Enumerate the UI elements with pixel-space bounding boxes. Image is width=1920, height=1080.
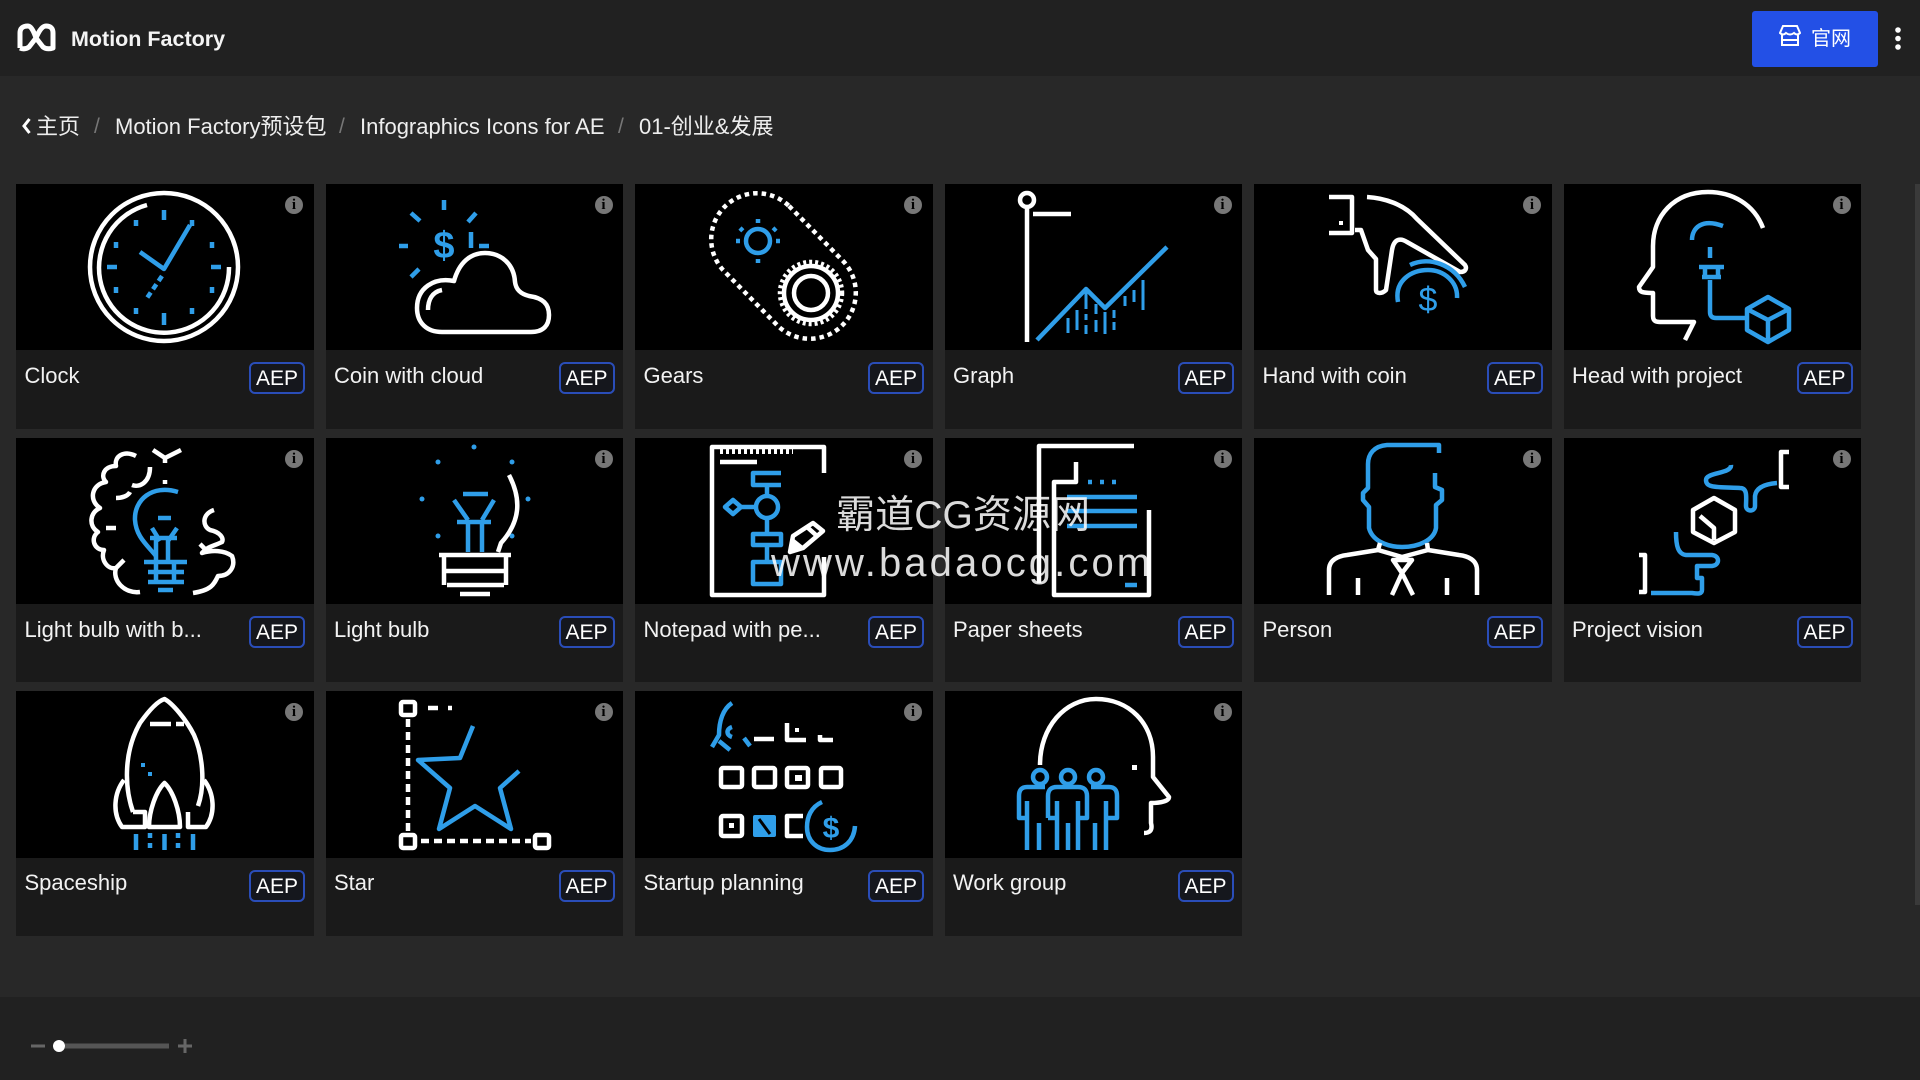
label: Clock: [24, 363, 80, 388]
format badge: [1178, 616, 1234, 648]
icon: paper sheets: [944, 438, 1242, 604]
icon: startup planning: [635, 691, 932, 858]
format badge: [558, 870, 614, 902]
format badge: [868, 362, 924, 394]
label: Light bulb with b...: [24, 617, 202, 642]
info badge: i: [911, 704, 915, 720]
card: Notepad with pen: [635, 438, 932, 682]
info badge: i: [1220, 197, 1225, 213]
label: Star: [334, 870, 374, 895]
icon: notepad with pen: [635, 438, 932, 604]
info badge: [904, 450, 922, 468]
info badge: i: [911, 197, 915, 213]
card: Head with project: [1564, 184, 1861, 429]
label: Work group: [953, 870, 1066, 895]
card: Graph: [944, 184, 1242, 429]
icon: head with project: [1564, 184, 1861, 350]
info badge: i: [601, 704, 606, 720]
icon: light bulb with brain: [16, 438, 314, 604]
info badge: i: [1530, 197, 1534, 213]
info badge: [594, 450, 612, 468]
format badge: [558, 362, 614, 394]
card: Coin with cloud: [326, 184, 623, 429]
icon: person: [1254, 438, 1552, 604]
label: Head with project: [1572, 363, 1742, 388]
header bar: [0, 0, 1920, 76]
label: Person: [1262, 617, 1332, 642]
icon: hand with coin: [1254, 184, 1552, 350]
info badge: i: [292, 704, 296, 720]
card: Project vision: [1564, 438, 1861, 682]
icon: coin with cloud: $: [433, 225, 454, 267]
card: Star: [326, 691, 623, 936]
icon: project vision: [1564, 438, 1861, 604]
info badge: [1523, 450, 1541, 468]
scrollbar: [1915, 184, 1920, 905]
crumb separators: /: [618, 115, 624, 138]
info badge: [594, 196, 612, 214]
zoom slider: [31, 1039, 192, 1053]
label: Startup planning: [644, 870, 804, 895]
info badge: i: [1839, 197, 1844, 213]
info badge: i: [1220, 451, 1225, 467]
format badge: [1487, 362, 1543, 394]
button label: 官网: [1811, 28, 1851, 50]
icon: more menu: [1895, 27, 1901, 50]
format badge: AEP: [256, 621, 298, 644]
label: Light bulb: [334, 617, 429, 642]
format badge: AEP: [256, 367, 298, 390]
crumb separators: /: [339, 115, 345, 138]
format badge: AEP: [565, 367, 608, 390]
format badge: AEP: [1184, 621, 1227, 644]
crumb: current: 01-创业&发展: [639, 114, 773, 139]
crumb: home: 主页: [36, 114, 80, 139]
format badge: AEP: [256, 875, 298, 898]
icon: back chevron: [22, 118, 31, 134]
format badge: [868, 616, 924, 648]
card: Person: [1254, 438, 1552, 682]
card: Clock: [16, 184, 314, 429]
watermark url: www.badaocg.com: [771, 541, 1153, 585]
crumb: icons: Infographics Icons for AE: [360, 114, 605, 139]
icon: store: [1779, 25, 1801, 46]
card: Spaceship: [16, 691, 314, 936]
info badge: [285, 196, 303, 214]
info badge: [1214, 703, 1232, 721]
format badge: AEP: [1184, 367, 1227, 390]
icon: work group: [944, 691, 1242, 858]
format badge: [249, 870, 305, 902]
crumb separators: [94, 115, 624, 138]
icon: startup planning: $: [823, 812, 840, 845]
icon: star: [326, 691, 623, 858]
format badge: [249, 616, 305, 648]
info badge: [1523, 196, 1541, 214]
format badge: AEP: [1184, 875, 1227, 898]
format badge: AEP: [875, 367, 917, 390]
info badge: i: [292, 451, 296, 467]
breadcrumb: [22, 114, 773, 139]
label: Hand with coin: [1262, 363, 1407, 388]
format badge: [1796, 362, 1852, 394]
info badge: [904, 703, 922, 721]
format badge: [249, 362, 305, 394]
format badge: [1178, 362, 1234, 394]
info badge: [1832, 196, 1850, 214]
label: Gears: [644, 363, 703, 388]
info badge: i: [911, 451, 915, 467]
info badge: i: [601, 451, 606, 467]
info badge: i: [1220, 704, 1225, 720]
info badge: [1832, 450, 1850, 468]
card: Startup planning: [635, 691, 932, 936]
card: Light bulb with brain: [16, 438, 314, 682]
button: official site: [1752, 11, 1878, 67]
info badge: [1214, 196, 1232, 214]
info badge: [904, 196, 922, 214]
icon: light bulb: [326, 438, 623, 604]
format badge: AEP: [565, 875, 608, 898]
info badge: [285, 703, 303, 721]
crumb: presets: Motion Factory预设包: [115, 114, 326, 139]
format badge: AEP: [1803, 621, 1846, 644]
icon: coin with cloud: [326, 184, 623, 350]
format badge: AEP: [875, 621, 917, 644]
info badge: i: [1530, 451, 1534, 467]
info badge: i: [1839, 451, 1844, 467]
crumb separators: /: [94, 115, 100, 138]
format badge: [1796, 616, 1852, 648]
card: Hand with coin: [1254, 184, 1552, 429]
format badge: AEP: [875, 875, 917, 898]
info badge: i: [292, 197, 296, 213]
watermark title: 霸道CG资源网: [836, 494, 1090, 537]
label: Project vision: [1572, 617, 1703, 642]
icon: hand with coin: $: [1419, 281, 1438, 319]
card: Light bulb: [326, 438, 623, 682]
brand name: Motion Factory: [71, 27, 225, 51]
icon: motion factory logo: [18, 24, 56, 52]
watermark: [770, 494, 1153, 585]
format badge: AEP: [565, 621, 608, 644]
info badge: [1214, 450, 1232, 468]
format badge: AEP: [1494, 621, 1536, 644]
label: Notepad with pe...: [644, 617, 821, 642]
format badge: [1178, 870, 1234, 902]
card: Paper sheets: [944, 438, 1242, 682]
format badge: AEP: [1494, 367, 1536, 390]
footer bar: [0, 997, 1920, 1080]
format badge: [1487, 616, 1543, 648]
label: Coin with cloud: [334, 363, 483, 388]
icon: graph: [944, 184, 1242, 350]
icon: gears: [635, 184, 932, 350]
card: Gears: [635, 184, 932, 429]
icon: spaceship: [16, 691, 314, 858]
info badge: [285, 450, 303, 468]
card: Work group: [944, 691, 1242, 936]
info badge: [594, 703, 612, 721]
info badge: i: [601, 197, 606, 213]
format badge: AEP: [1803, 367, 1846, 390]
label: Spaceship: [24, 870, 127, 895]
label: Graph: [953, 363, 1014, 388]
icon: clock: [16, 184, 314, 350]
format badge: [558, 616, 614, 648]
format badge: [868, 870, 924, 902]
label: Paper sheets: [953, 617, 1083, 642]
